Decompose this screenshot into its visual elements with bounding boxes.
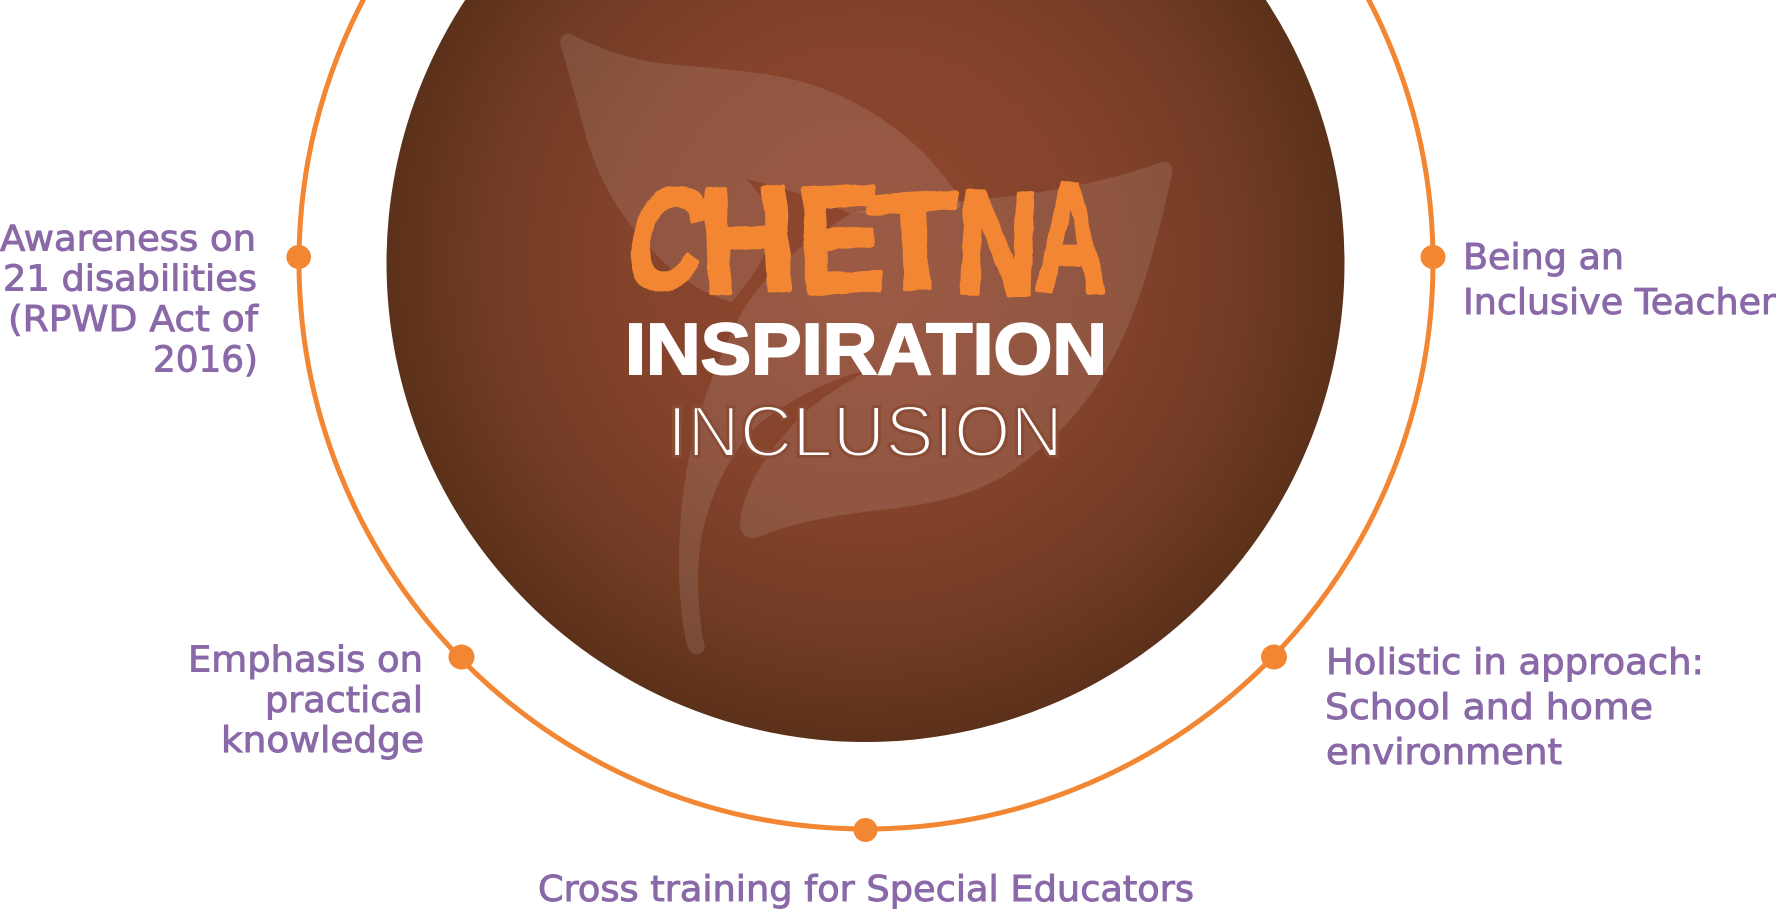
node: practical knowledge [448,644,474,670]
label: awareness on 21 disabilities: 21 disabilities [3,258,257,300]
label: cross training: Cross training for Special Educators [538,869,1194,910]
label: being an inclusive teacher: Inclusive Teacher [1463,282,1776,323]
label: holistic in approach: School and home [1325,687,1653,728]
label: awareness on 21 disabilities: (RPWD Act of [8,299,260,340]
label: emphasis on practical knowledge [188,640,424,761]
subtitle: INSPIRATION: INSPIRATION [625,310,1107,390]
title: CHETNA: E [794,154,887,326]
label: emphasis on practical knowledge: practical [265,680,423,721]
node: inclusive teacher [1420,245,1446,269]
central brown circle [386,0,1344,742]
label: holistic in approach [1325,642,1704,773]
label: emphasis on practical knowledge: knowledge [221,720,424,761]
orange ring [299,0,1433,829]
title: CHETNA: H [695,153,799,325]
node: holistic [1261,644,1287,670]
title: CHETNA: N [954,160,1041,327]
leaf watermark [560,34,1172,654]
label: awareness on 21 disabilities: 2016) [153,340,258,380]
label: awareness on 21 disabilities [0,218,260,380]
title: CHETNA [615,150,1105,327]
label: holistic in approach: Holistic in approach: [1326,642,1704,683]
label: holistic in approach: environment [1326,732,1562,773]
label: awareness on 21 disabilities: Awareness on [0,218,256,260]
label: emphasis on practical knowledge: Emphasis on [188,640,423,680]
node: awareness [286,245,311,269]
label: being an inclusive teacher [1463,237,1776,323]
subtitle: INCLUSION: INCLUSION [667,392,1063,472]
title: CHETNA: T [866,163,963,319]
title: CHETNA: C [615,157,721,320]
label: being an inclusive teacher: Being an [1463,237,1624,278]
node: cross training [854,818,878,842]
title: CHETNA: A [1035,150,1105,325]
